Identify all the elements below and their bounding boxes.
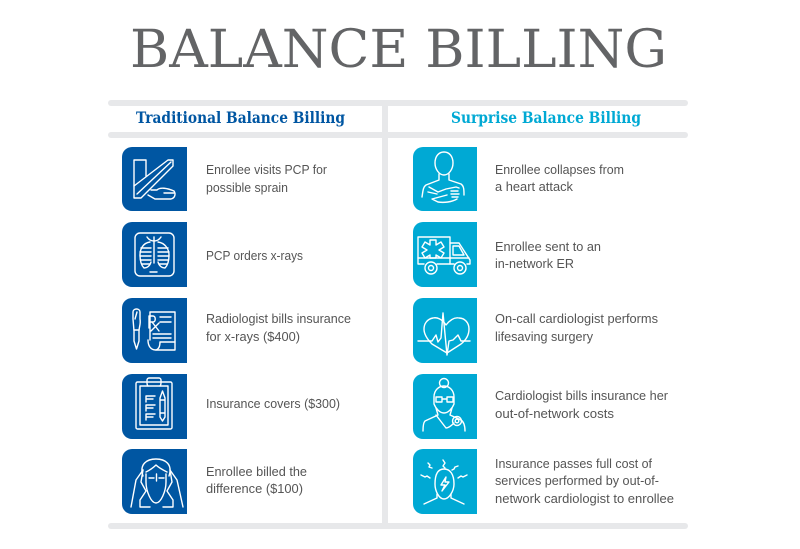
text: Enrollee billed the [206,465,307,479]
step: enrollee billed the difference [122,449,307,514]
step: insurance passes full cost [413,449,674,514]
panel: surprise balance billing steps [413,147,674,514]
icon: person clutching chest [422,152,464,202]
icon: arm sling [134,160,175,199]
step: insurance covers [122,374,340,439]
icon: doctor with stethoscope [423,378,465,431]
text: lifesaving surgery [495,330,594,344]
text [206,465,307,496]
step: radiologist bills insurance [122,298,351,363]
text: out-of-network costs [495,407,614,421]
text: Insurance passes full cost of [495,457,652,471]
step: cardiologist bills insurance [413,374,668,439]
icon: prescription and pen [133,309,175,350]
text: possible sprain [206,181,288,195]
text: Enrollee visits PCP for [206,163,327,177]
title: BALANCE BILLING [130,20,667,80]
text: Insurance covers ($300) [206,397,340,411]
text: network cardiologist to enrollee [495,492,674,506]
text: Enrollee sent to an [495,240,601,254]
step: PCP orders x-rays [122,222,303,287]
step: enrollee collapses [413,147,624,211]
icon: ambulance [418,237,470,274]
icon: person with headache [131,459,183,507]
text: services performed by out-of- [495,474,659,488]
text [495,240,601,271]
text [495,312,658,344]
step: on-call cardiologist surgery [413,298,658,363]
text: difference ($100) [206,482,303,496]
text [495,389,668,421]
heading: surprise balance billing: Surprise Balance Billing [451,108,641,127]
icon: stressed head with lightning [421,460,467,504]
text [206,312,351,344]
step: enrollee visits PCP [122,147,327,211]
text: in-network ER [495,257,574,271]
text: PCP orders x-rays [206,249,303,263]
text: Cardiologist bills insurance her [495,389,668,403]
text [206,163,327,195]
text [495,163,624,194]
text [495,457,674,506]
text: Radiologist bills insurance [206,312,351,326]
text: Enrollee collapses from [495,163,624,177]
panel: traditional balance billing steps [122,147,351,514]
table frame [108,100,688,529]
text: On-call cardiologist performs [495,312,658,326]
heading: traditional balance billing: Traditional Balance Billing [136,108,345,127]
text: for x-rays ($400) [206,330,300,344]
icon: x-ray ribcage [135,233,174,276]
text: a heart attack [495,180,574,194]
step: enrollee sent to ER [413,222,601,287]
icon: heart with ECG line [418,313,470,355]
icon: clipboard checklist [136,378,172,429]
